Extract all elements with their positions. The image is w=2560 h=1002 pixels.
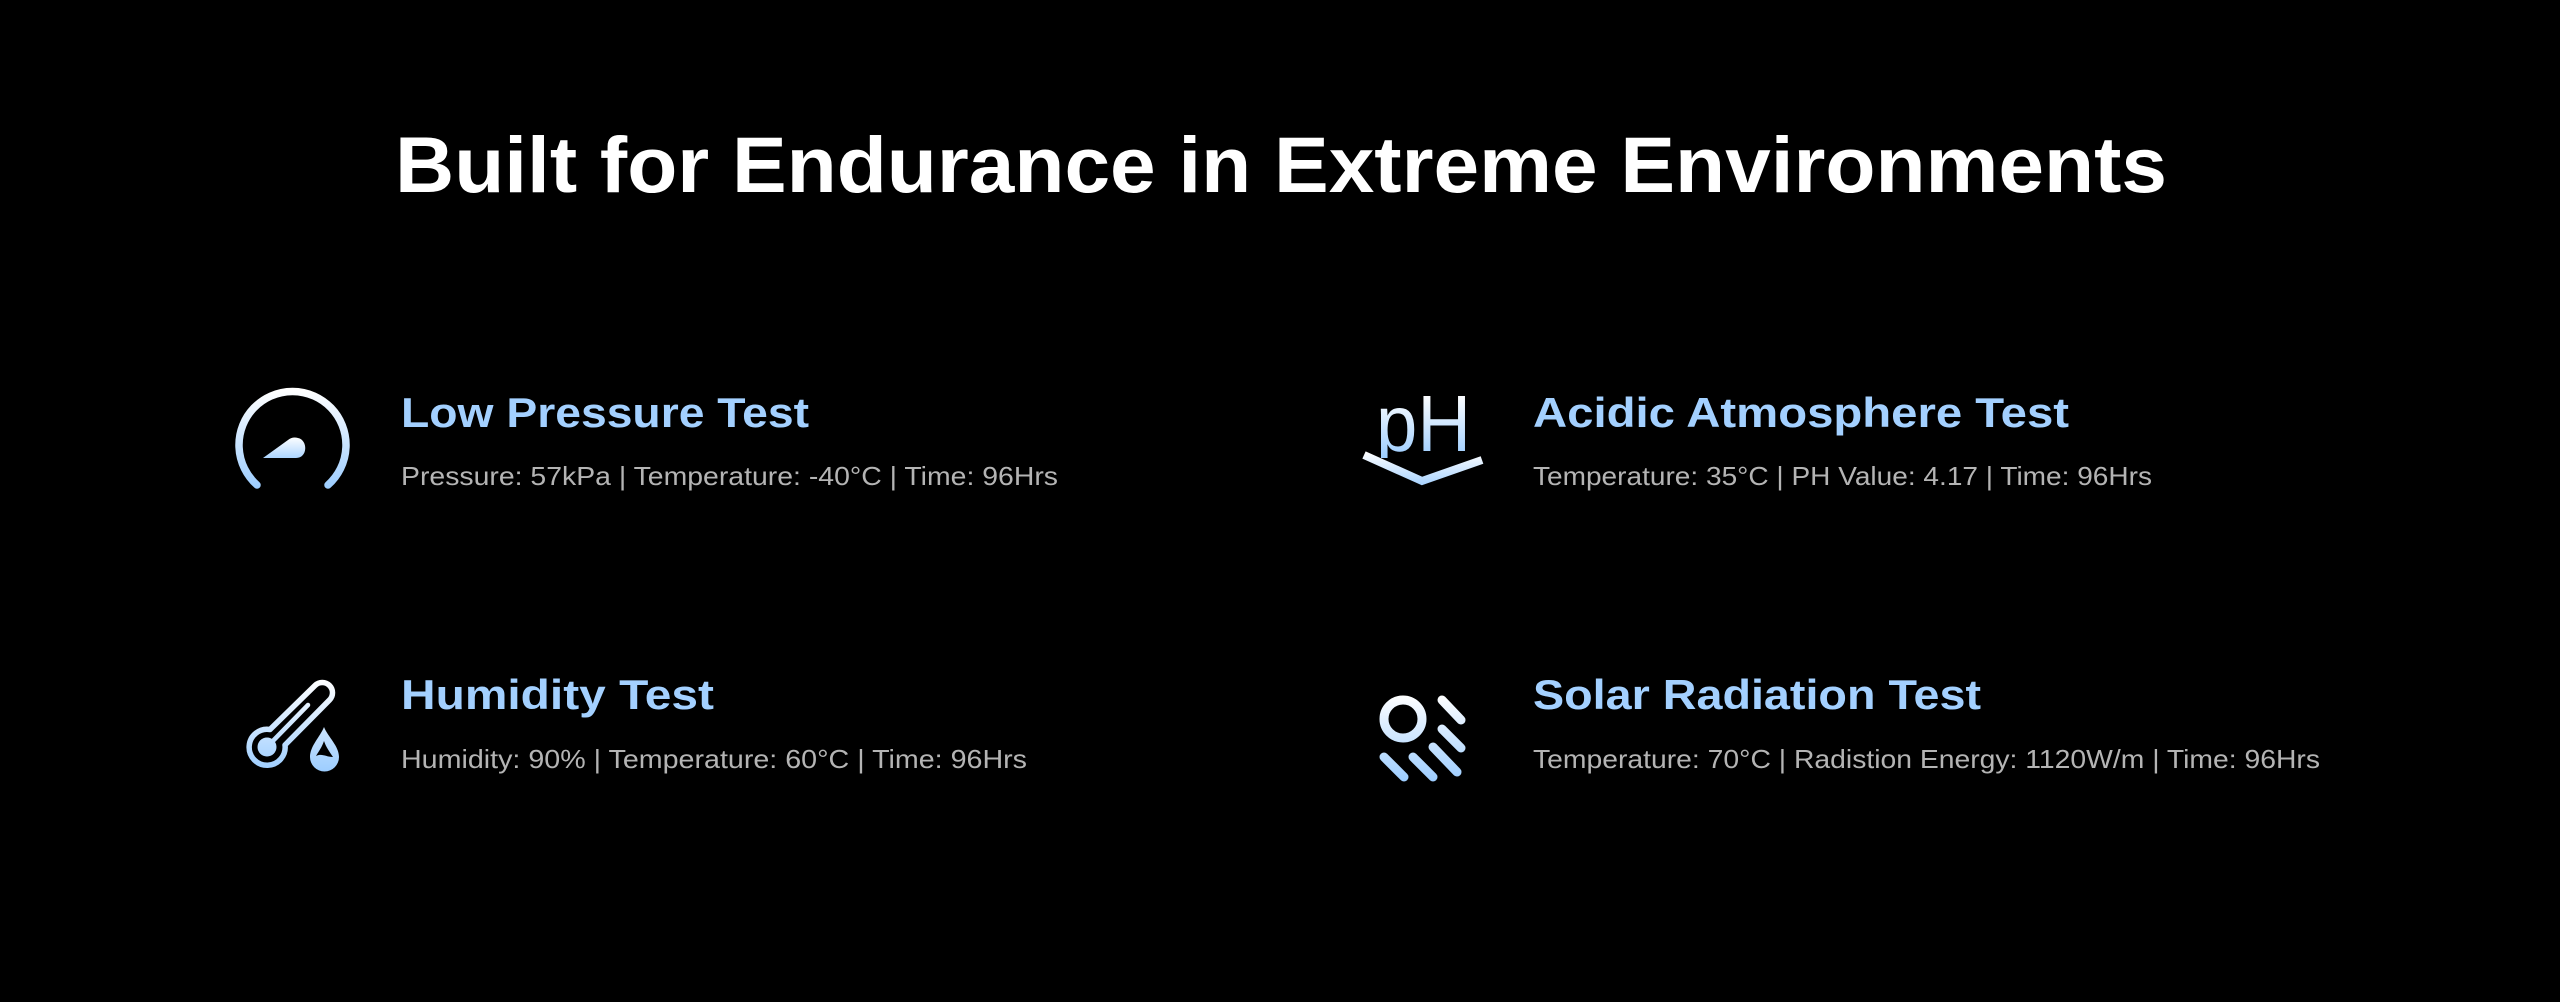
icon: pH: pH bbox=[1376, 379, 1471, 468]
heading: Low Pressure Test bbox=[401, 389, 809, 436]
heading: Solar Radiation Test bbox=[1533, 671, 1981, 718]
heading: Acidic Atmosphere Test bbox=[1533, 389, 2069, 436]
panel: humidity test bbox=[249, 671, 1027, 774]
details: Humidity: 90% | Temperature: 60°C | Time: 96Hrs bbox=[401, 744, 1027, 774]
title: Built for Endurance in Extreme Environments bbox=[395, 120, 2167, 209]
details: Temperature: 70°C | Radistion Energy: 1120W/m | Time: 96Hrs bbox=[1533, 744, 2320, 774]
heading: Humidity Test bbox=[401, 671, 714, 718]
details: Temperature: 35°C | PH Value: 4.17 | Time: 96Hrs bbox=[1533, 461, 2152, 491]
icon: thermometer and drop bbox=[249, 682, 339, 772]
details: Pressure: 57kPa | Temperature: -40°C | Time: 96Hrs bbox=[401, 461, 1058, 491]
icon: gauge bbox=[239, 391, 346, 485]
icon: sun and rays bbox=[1384, 700, 1461, 777]
panel: low pressure test bbox=[239, 389, 1058, 491]
panel: solar radiation test bbox=[1384, 671, 2320, 777]
panel: acidic atmosphere test bbox=[1362, 396, 2151, 490]
